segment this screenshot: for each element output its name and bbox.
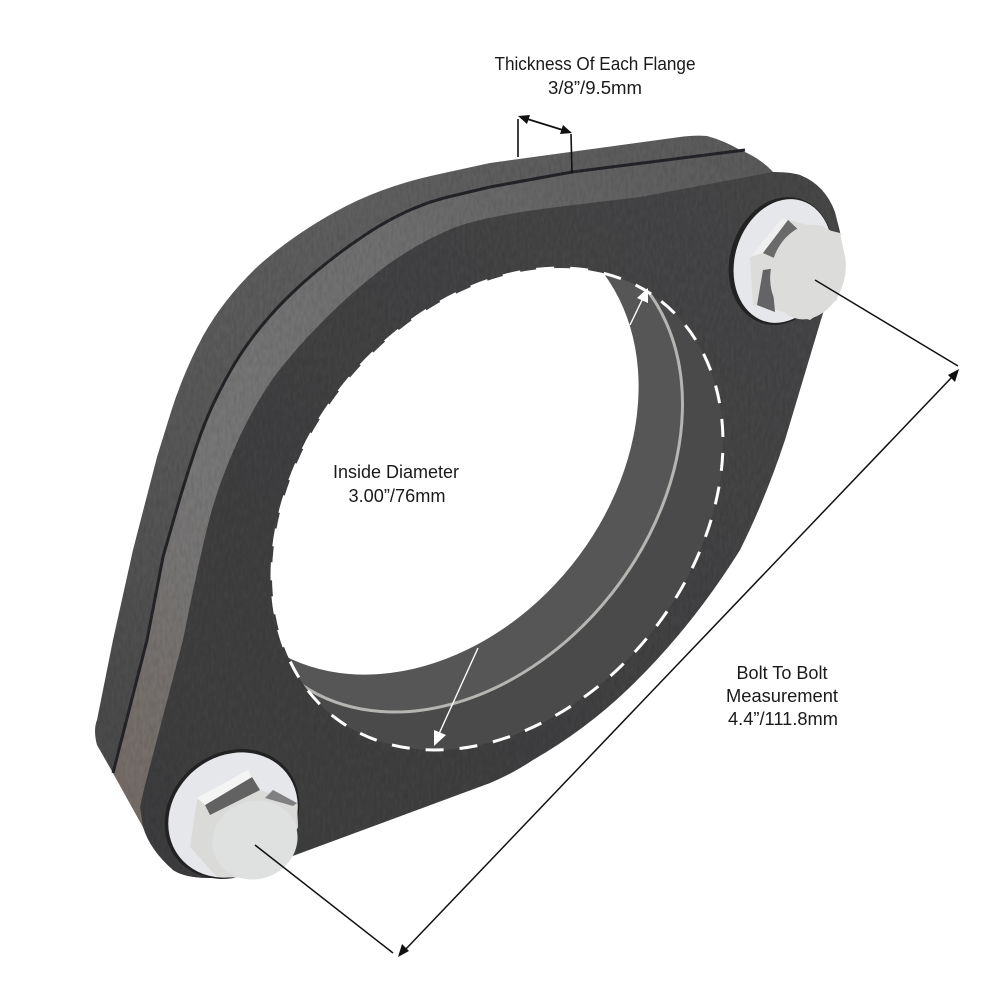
label: bolt to bolt measurement: Measurement	[726, 686, 838, 706]
upper facet dark band	[763, 220, 802, 262]
hex head	[190, 770, 298, 878]
weld seam	[113, 150, 745, 773]
label: thickness of each flange: Thickness Of Each Flange	[494, 54, 696, 74]
thickness dimension arrow	[518, 115, 572, 173]
washer shadow	[138, 722, 326, 906]
bolt to bolt dimension arrows	[255, 280, 959, 957]
flange dimension infographic	[95, 56, 959, 957]
label: inside diameter	[333, 462, 459, 506]
head side facet	[265, 790, 297, 806]
lower facet dark band	[757, 268, 777, 312]
hex head	[750, 218, 845, 320]
bolt: lower left	[138, 722, 326, 906]
flange front plate edge	[113, 150, 773, 870]
washer	[143, 727, 323, 903]
bore opening	[272, 268, 723, 750]
label: thickness of each flange	[494, 54, 696, 98]
bolt: upper right	[713, 184, 856, 338]
label: thickness of each flange: 3/8”/9.5mm	[548, 78, 642, 98]
upper facet dark band	[205, 777, 260, 815]
flange front face	[140, 172, 841, 878]
bore outer wall	[312, 296, 723, 750]
flange body	[95, 136, 841, 878]
upper facet highlight	[750, 218, 788, 257]
flange outer plate edge	[95, 136, 840, 878]
label: bolt to bolt measurement: 4.4”/111.8mm	[728, 709, 838, 729]
washer	[719, 187, 847, 335]
see-through hole	[272, 268, 639, 675]
washer shadow	[713, 184, 849, 338]
label: inside diameter: 3.00”/76mm	[348, 486, 446, 506]
label: bolt to bolt measurement	[726, 663, 838, 729]
label: inside diameter: Inside Diameter	[333, 462, 459, 482]
label: bolt to bolt measurement: Bolt To Bolt	[736, 663, 828, 683]
facet highlight	[197, 770, 252, 805]
inside diameter white arrow	[434, 288, 648, 746]
bore inner wall	[288, 276, 681, 710]
head end face	[201, 789, 309, 891]
dashed inside diameter outline	[179, 179, 816, 839]
head end face	[760, 216, 856, 328]
silver weld bead	[303, 294, 684, 714]
